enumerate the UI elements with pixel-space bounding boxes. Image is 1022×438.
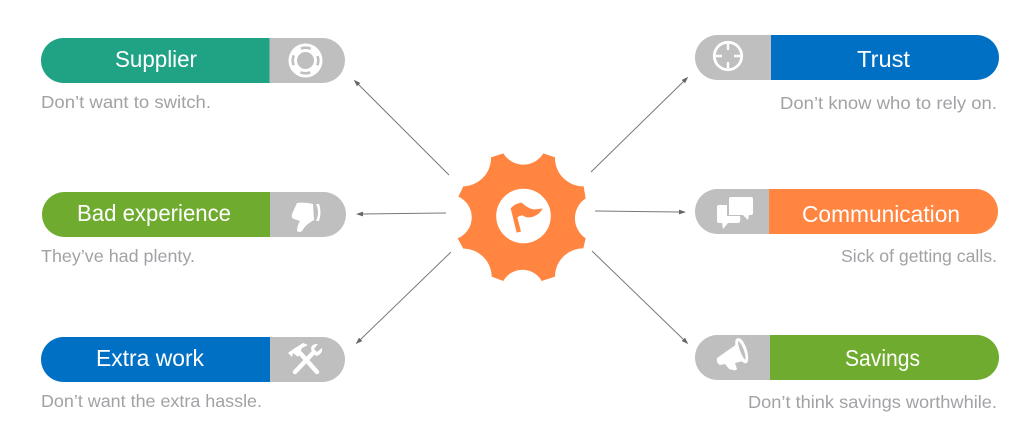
- arrow: to trust: [591, 81, 684, 172]
- pill: trust: [695, 35, 999, 80]
- pill: savings: Savings: [845, 345, 920, 371]
- icon: target: [714, 42, 742, 70]
- panel: trust: [695, 35, 999, 113]
- panel: supplier: [41, 38, 345, 112]
- caption: trust: Don’t know who to rely on.: [780, 93, 997, 113]
- caption: bad experience: They’ve had plenty.: [41, 246, 195, 266]
- central gear icon: [458, 153, 586, 281]
- pill: extra work: Extra work: [96, 345, 204, 371]
- pill: communication: [695, 189, 998, 234]
- caption: supplier: Don’t want to switch.: [41, 92, 211, 112]
- arrow: to supplier: [358, 84, 449, 175]
- arrow: to communication: [595, 211, 680, 212]
- pill: bad experience: Bad experience: [77, 200, 231, 226]
- pill: bad experience: [42, 192, 346, 237]
- icon: speech bubbles: [717, 197, 753, 229]
- pill: savings: [695, 335, 999, 380]
- caption: savings: Don’t think savings worthwhile.: [748, 392, 997, 412]
- pill: supplier: [41, 38, 345, 83]
- arrow: to bad experience: [362, 213, 446, 214]
- panel: extra work: [41, 337, 345, 411]
- caption: extra work: Don’t want the extra hassle.: [41, 391, 262, 411]
- icon: lifebuoy: [288, 44, 322, 78]
- icon: flag: [511, 203, 543, 233]
- panel: communication: [695, 189, 998, 266]
- pill: communication: Communication: [802, 201, 960, 227]
- pill: trust: Trust: [857, 46, 910, 72]
- panel: savings: [695, 335, 999, 412]
- icon: megaphone: [717, 338, 748, 370]
- icon: thumbs down: [292, 203, 320, 232]
- arrow: to extra work: [360, 252, 451, 340]
- arrow: to savings: [592, 251, 684, 340]
- caption: communication: Sick of getting calls.: [841, 246, 997, 266]
- pill: extra work: [41, 337, 345, 382]
- icon: hammer and wrench: [288, 343, 322, 372]
- pill: supplier: Supplier: [115, 46, 197, 72]
- panel: bad experience: [41, 192, 346, 266]
